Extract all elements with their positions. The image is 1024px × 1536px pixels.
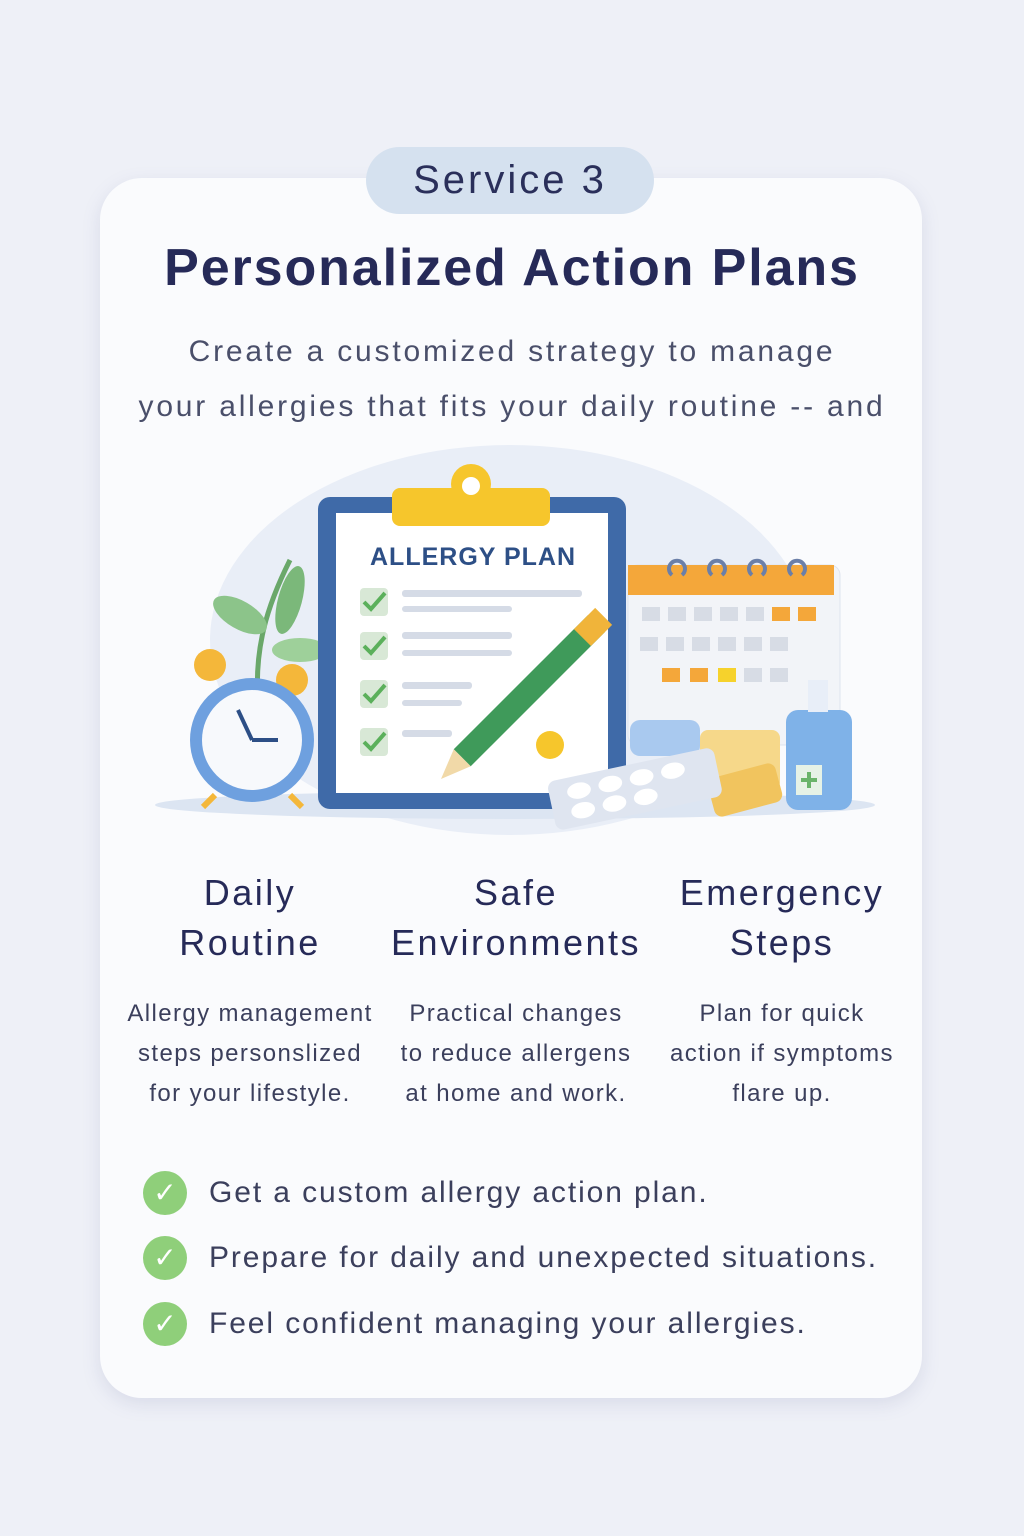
column: safe environments: Practical changes	[409, 1000, 623, 1027]
pill label	[366, 147, 654, 214]
checklist item 3: ✓	[153, 1308, 177, 1339]
column: safe environments: at home and work.	[405, 1080, 627, 1107]
icon: calendar	[628, 561, 840, 745]
illustration	[155, 445, 875, 835]
column: daily routine: Routine	[179, 922, 321, 963]
icon: pencil	[433, 608, 612, 787]
column: emergency steps: action if symptoms	[670, 1040, 894, 1067]
checklist item 1: Get a custom allergy action plan.	[209, 1176, 709, 1209]
checklist item 3: Feel confident managing your allergies.	[209, 1307, 807, 1340]
subtitle: Create a customized strategy to manage	[189, 335, 835, 368]
icon: clipboard: ALLERGY PLAN	[370, 543, 576, 571]
card	[100, 178, 922, 1398]
column: emergency steps	[670, 872, 894, 1107]
column: safe environments	[391, 872, 641, 1107]
subtitle	[138, 335, 885, 423]
icon: clipboard	[318, 464, 626, 809]
pill label: Service 3	[413, 158, 607, 202]
column: emergency steps: Emergency	[680, 872, 884, 913]
checklist item 1	[143, 1171, 709, 1215]
checklist item 2: Prepare for daily and unexpected situations.	[209, 1241, 878, 1274]
icon: plant	[207, 560, 328, 720]
subtitle: your allergies that fits your daily routine -- and	[139, 390, 885, 423]
checklist item 2	[143, 1236, 878, 1280]
column: daily routine	[127, 872, 373, 1107]
column: emergency steps: Plan for quick	[699, 1000, 864, 1027]
column: daily routine: Allergy management	[127, 1000, 373, 1027]
column: safe environments: Safe	[474, 872, 558, 913]
column: emergency steps: flare up.	[732, 1080, 832, 1107]
checklist item 3	[143, 1302, 807, 1346]
title: Personalized Action Plans	[164, 239, 860, 297]
checklist item 1: ✓	[153, 1177, 177, 1208]
column: emergency steps: Steps	[730, 922, 834, 963]
column: safe environments: Environments	[391, 922, 641, 963]
column: daily routine: Daily	[204, 872, 296, 913]
column: daily routine: for your lifestyle.	[149, 1080, 351, 1107]
column: daily routine: steps personslized	[138, 1040, 362, 1067]
column: safe environments: to reduce allergens	[401, 1040, 631, 1067]
icon: alarm clock	[190, 649, 314, 807]
checklist item 2: ✓	[153, 1242, 177, 1273]
icon: pills and items	[547, 680, 852, 831]
